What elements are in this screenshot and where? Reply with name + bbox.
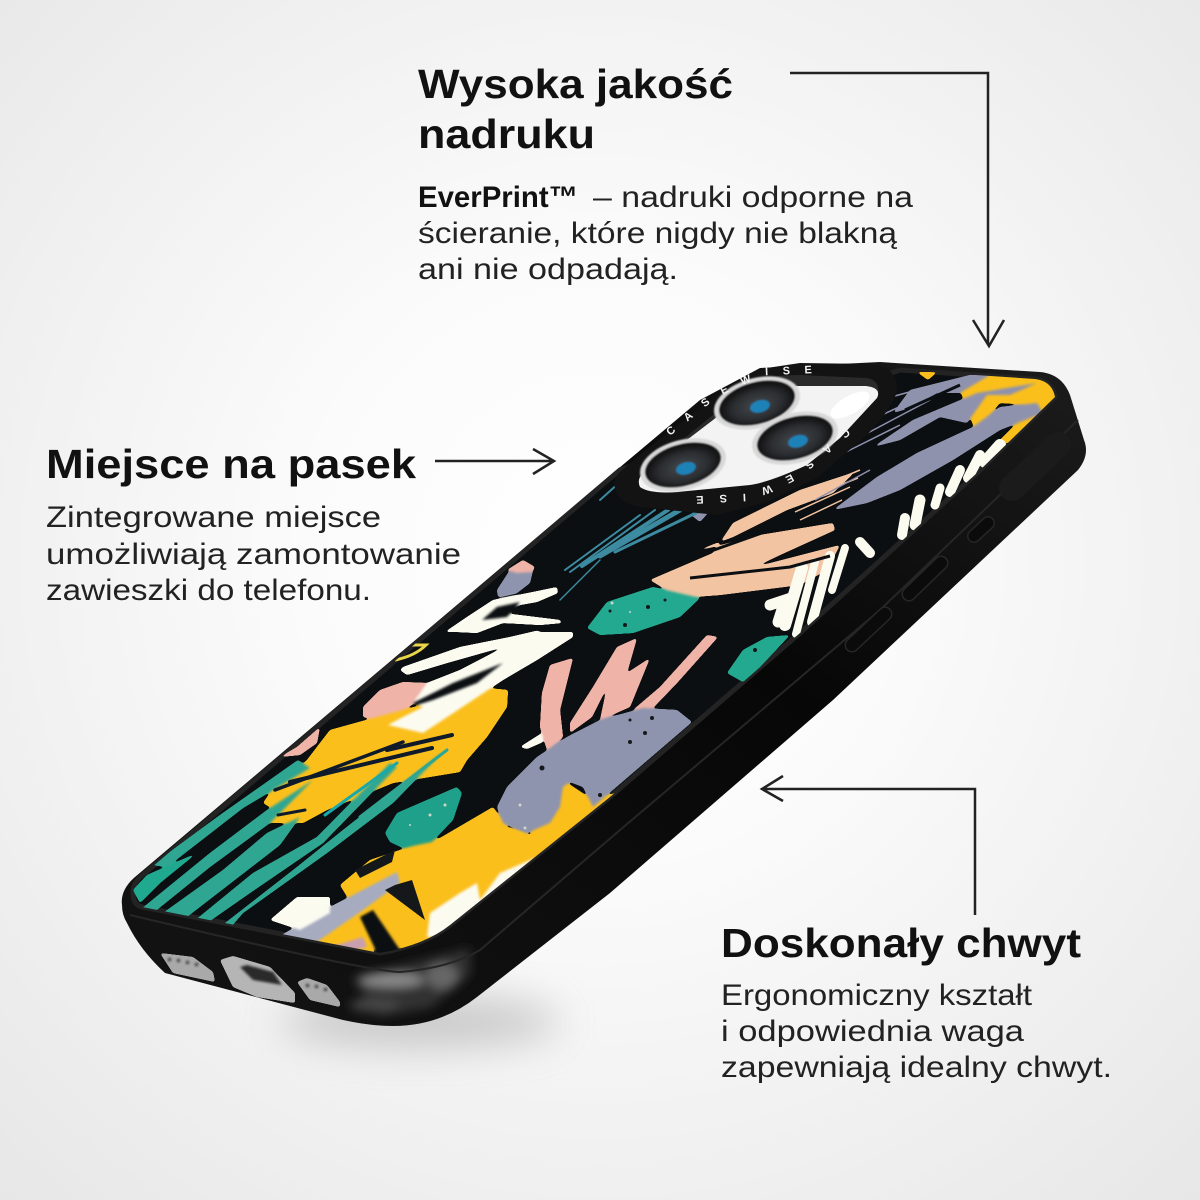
body text: ścieranie, które nigdy nie blakną — [418, 217, 897, 250]
scribble gaps — [413, 602, 520, 705]
heading: nadruku — [418, 111, 595, 157]
grey arch — [497, 708, 692, 833]
camera bezel — [614, 363, 897, 515]
green blobs — [587, 587, 790, 682]
body text: zapewniają idealny chwyt. — [721, 1051, 1112, 1084]
speaker holes — [168, 958, 327, 991]
arrow to strap slot — [435, 449, 554, 474]
green leaf — [385, 787, 462, 848]
body text — [46, 501, 461, 607]
speckles — [540, 598, 757, 797]
corner highlights — [350, 948, 470, 1016]
green fan strokes — [140, 750, 445, 928]
heading: Doskonały chwyt — [721, 920, 1081, 966]
small pink stroke — [334, 936, 368, 950]
small grey and pink mark — [497, 570, 533, 597]
lens top — [708, 367, 806, 439]
body text: ani nie odpadają. — [418, 253, 678, 286]
printed pattern — [133, 372, 1057, 955]
camera window — [639, 375, 878, 492]
lens right — [746, 402, 844, 474]
side buttons — [852, 445, 1058, 645]
heading: Wysoka jakość — [418, 61, 733, 107]
body text — [721, 979, 1112, 1084]
peach brush strokes — [650, 472, 855, 598]
body text — [418, 181, 913, 286]
light grey stroke — [273, 872, 400, 942]
main yellow patch — [263, 688, 508, 823]
lens left — [634, 429, 732, 501]
teal-blue streaks — [560, 482, 698, 600]
zebra brush marks — [770, 445, 1000, 634]
cream blob — [270, 897, 330, 930]
phone with patterned case — [122, 362, 1086, 1026]
body text: – nadruki odporne na — [593, 181, 913, 214]
lavender brush strokes — [690, 375, 1043, 522]
top yellow — [917, 372, 1057, 447]
brand text bottom: CASEWISE — [696, 430, 850, 504]
body text: zawieszki do telefonu. — [46, 574, 371, 607]
body text: EverPrint™ — [418, 181, 578, 214]
case rim and dark print base — [133, 370, 1055, 953]
side groove — [130, 420, 1078, 972]
arrow to case side — [762, 776, 975, 915]
white pebble — [520, 733, 543, 749]
pink corner — [283, 729, 320, 756]
brush spikes — [690, 385, 960, 578]
pink snail — [363, 682, 427, 720]
lower yellow patch — [307, 780, 625, 955]
body text: umożliwiają zamontowanie — [46, 538, 461, 571]
callout: strap slot — [46, 441, 554, 607]
pattern shapes — [133, 372, 1057, 955]
heading: Miejsce na pasek — [46, 441, 416, 487]
case body — [122, 362, 1086, 1026]
pink strokes — [540, 635, 718, 750]
dark scratch marks — [355, 850, 425, 920]
arrow to case top — [790, 73, 1004, 346]
body text: i odpowiednia waga — [721, 1015, 1024, 1048]
callout: print quality — [418, 61, 1004, 346]
white flame — [427, 857, 537, 937]
body text: Zintegrowane miejsce — [46, 501, 381, 534]
phone shadow — [280, 996, 560, 1048]
small yellow scribble — [395, 645, 426, 660]
body text: Ergonomiczny kształt — [721, 979, 1033, 1012]
bottom ports — [160, 953, 340, 1007]
brand text top: CASEWISE — [666, 366, 812, 434]
cream scribble — [388, 587, 573, 733]
callout: perfect grip — [721, 776, 1112, 1084]
dark bar — [360, 910, 400, 953]
navy and teal strokes on yellow — [275, 735, 452, 817]
camera module — [614, 363, 896, 514]
heading — [418, 61, 733, 157]
